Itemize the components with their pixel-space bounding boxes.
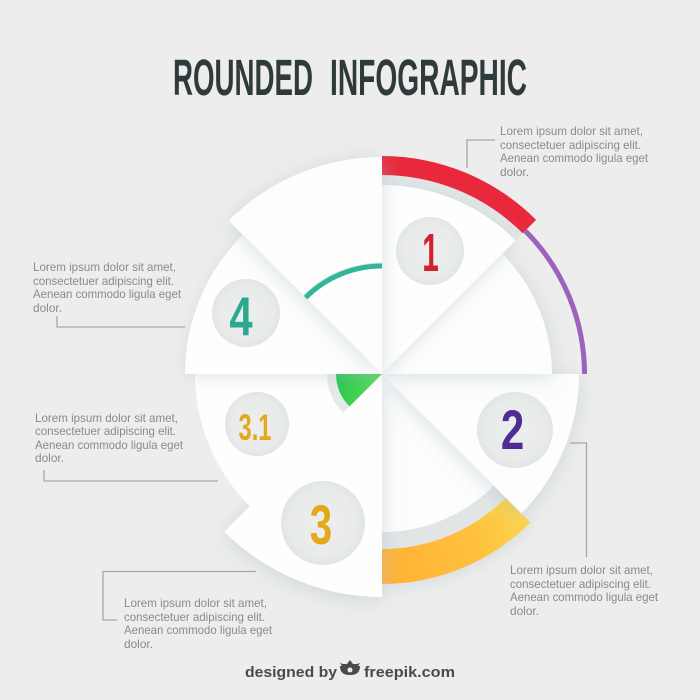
badge 2 <box>477 392 553 468</box>
callout 4 text: dolor. <box>33 301 62 315</box>
callout 2 leader line <box>570 443 586 557</box>
badge 4: 4 <box>229 287 253 347</box>
callout 3.1 text: Aenean commodo ligula eget <box>35 438 184 452</box>
callout 3.1 leader line <box>44 470 218 481</box>
callout 2 text <box>510 563 659 618</box>
badge 3.1: 3.1 <box>239 407 271 448</box>
top left wedge with teal arc <box>229 157 382 374</box>
upper right inner wedge <box>382 254 552 374</box>
purple arc <box>525 231 584 374</box>
footer credit: freepik.com <box>364 664 455 681</box>
footer credit <box>245 660 455 681</box>
badge 1: 1 <box>422 224 439 283</box>
segment 1 wedge with red band <box>382 156 536 374</box>
callout 1 leader line <box>467 140 495 168</box>
segment 4 wedge <box>185 235 382 374</box>
segment 3.1 wedge <box>195 374 382 506</box>
callout 1 text <box>500 124 649 179</box>
badge 4 <box>212 279 280 347</box>
callout 1 text: Aenean commodo ligula eget <box>500 151 649 165</box>
callout 2 text: Lorem ipsum dolor sit amet, <box>510 563 653 577</box>
segment 3 wedge <box>224 374 382 597</box>
callout 3 text: dolor. <box>124 637 153 651</box>
callout 1 text: consectetuer adipiscing elit. <box>500 138 641 152</box>
callout 3 text <box>124 596 273 651</box>
footer credit: designed by <box>245 664 338 681</box>
callout 3 text: Aenean commodo ligula eget <box>124 623 273 637</box>
callout 3.1 text <box>35 411 184 465</box>
segment: yellow band and lower inner wedge <box>382 374 530 584</box>
callout 4 text: Aenean commodo ligula eget <box>33 287 182 301</box>
callout 4 text: Lorem ipsum dolor sit amet, <box>33 260 176 274</box>
callout 3 text: Lorem ipsum dolor sit amet, <box>124 596 267 610</box>
title: INFOGRAPHIC <box>330 49 527 106</box>
callout 3 leader line <box>103 572 256 620</box>
green centre wedge <box>327 374 382 413</box>
title: ROUNDED <box>173 49 313 106</box>
callout 3 text: consectetuer adipiscing elit. <box>124 610 265 624</box>
badge 3: 3 <box>310 495 332 557</box>
callout 4 text <box>33 260 182 315</box>
callout 3.1 text: consectetuer adipiscing elit. <box>35 424 176 438</box>
callout 3.1 text: dolor. <box>35 451 64 465</box>
callout 1 text: Lorem ipsum dolor sit amet, <box>500 124 643 138</box>
callout 2 text: Aenean commodo ligula eget <box>510 590 659 604</box>
callout 1 text: dolor. <box>500 165 529 179</box>
callout 4 text: consectetuer adipiscing elit. <box>33 274 174 288</box>
callout 2 text: dolor. <box>510 604 539 618</box>
badge 2: 2 <box>501 399 524 461</box>
badge 3.1 <box>225 392 289 456</box>
callout 4 leader line <box>57 316 185 327</box>
badge 3 <box>281 481 365 565</box>
segment 2 wedge <box>382 374 579 513</box>
callout 2 text: consectetuer adipiscing elit. <box>510 577 651 591</box>
callout 3.1 text: Lorem ipsum dolor sit amet, <box>35 411 178 425</box>
badge 1 <box>396 217 464 285</box>
